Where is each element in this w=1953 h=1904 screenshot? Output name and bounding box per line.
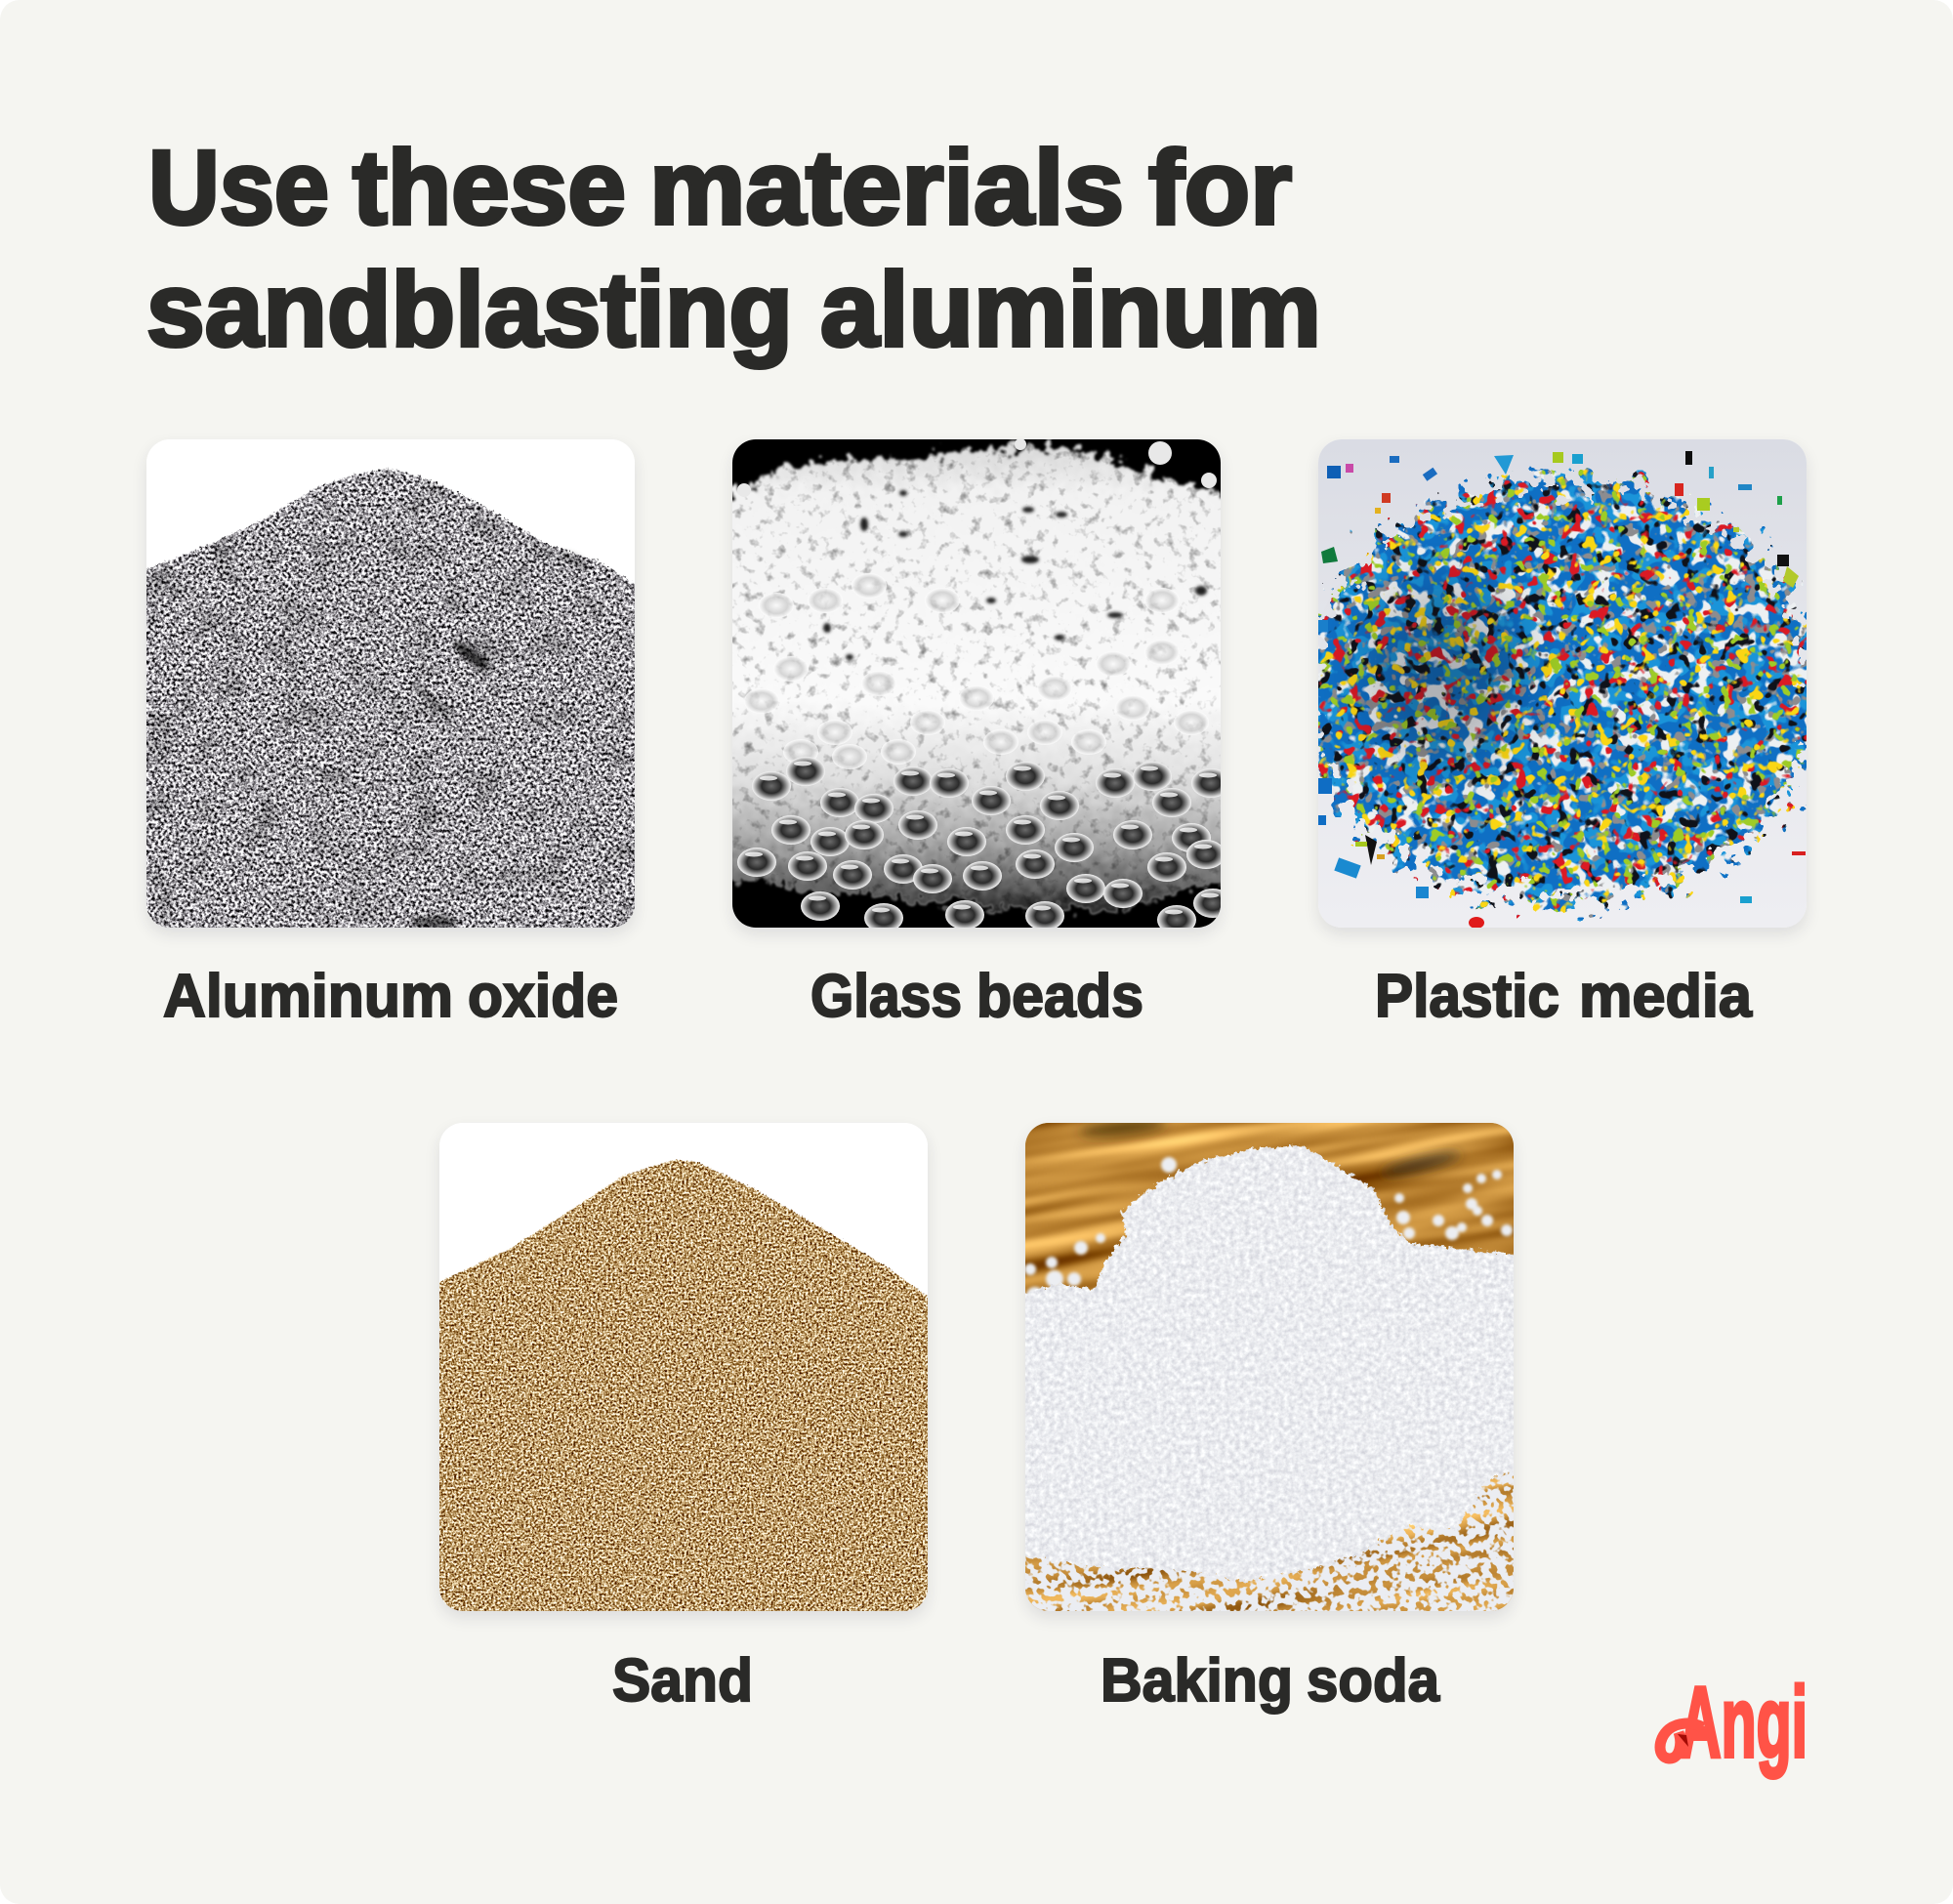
label: baking soda: soda [1307,1647,1439,1715]
light beads [744,688,779,714]
dark flecks [823,490,1207,660]
title: sandblasting [146,250,793,368]
stray plastic pieces [1318,451,1806,929]
label: glass beads: beads [976,963,1143,1030]
label: glass beads: Glass [810,963,962,1030]
label: aluminum oxide: Aluminum [163,963,453,1030]
title: materials [649,128,1124,246]
title: these [353,128,626,246]
clear dark-centered beads [752,771,791,801]
label: aluminum oxide: oxide [468,963,618,1030]
image: baking soda on wood [1025,1123,1514,1611]
image: sand pile [439,1123,928,1611]
stray beads [737,438,1217,497]
label: plastic media: media [1579,963,1752,1030]
label: aluminum oxide [163,963,618,1030]
panel: aluminum oxide [144,439,638,1030]
title [146,128,1321,370]
label: sand: Sand [612,1647,753,1715]
label: baking soda: Baking [1101,1647,1293,1715]
image: glass beads pile [732,439,1221,928]
title: for [1148,128,1292,246]
image: plastic media confetti pile [1318,439,1807,928]
label: baking soda [1101,1647,1441,1715]
mound [1006,1145,1533,1582]
title: aluminum [820,250,1321,368]
title: Use [148,128,329,246]
label: glass beads [810,963,1143,1030]
panel: plastic media [1315,439,1809,1030]
image: aluminum oxide powder pile [146,439,635,928]
panel: glass beads [729,439,1224,1030]
panel: baking soda [1022,1123,1517,1715]
powder specks [1025,1435,1514,1611]
label: plastic media [1375,963,1754,1030]
panel: sand [436,1123,931,1715]
label: plastic media: Plastic [1375,963,1559,1030]
